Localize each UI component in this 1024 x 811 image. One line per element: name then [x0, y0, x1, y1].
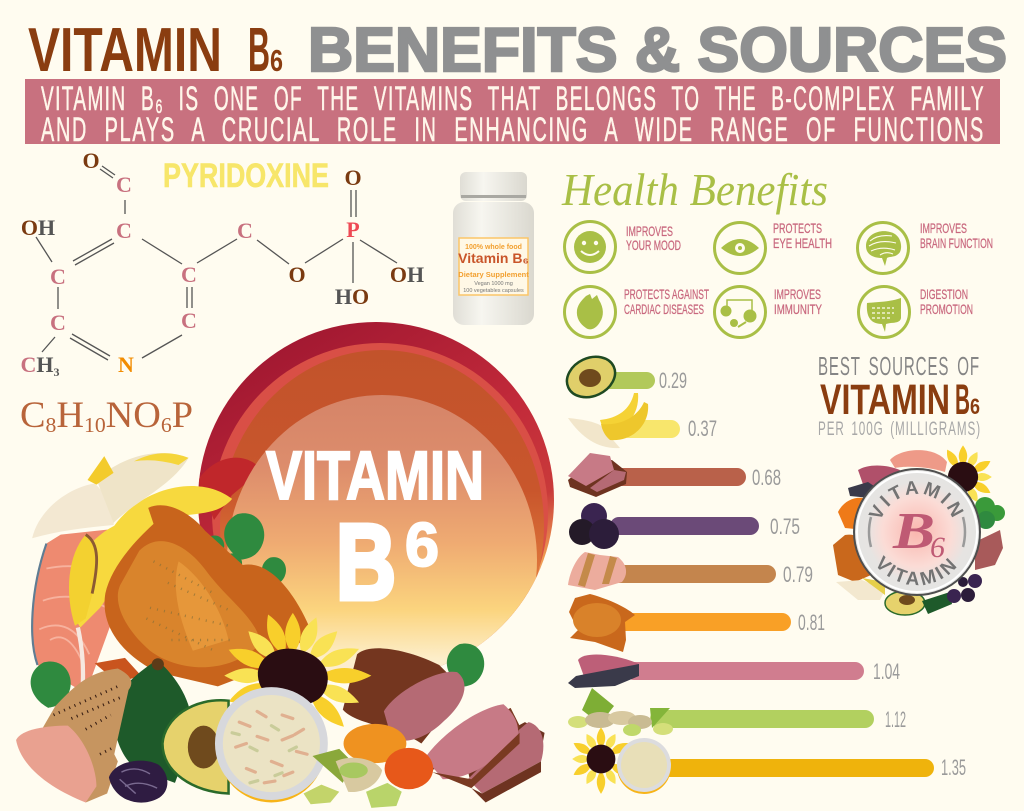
salmon [32, 529, 123, 694]
icon: supplement bottle: Vegan 1000 mg [474, 281, 513, 287]
bar: ham 0.79: 0.79 [783, 562, 813, 587]
text: digestion promotion [920, 286, 973, 317]
bar: chicken 0.81: 0.81 [798, 610, 825, 635]
bar: chicken 0.81 [569, 594, 825, 652]
badge: vitamin B6 with foods: VITAMIN [868, 481, 964, 518]
badge: vitamin B6 with foods [833, 446, 1005, 616]
chemical formula: P [172, 395, 193, 436]
text: improves your mood: IMPROVES [626, 223, 673, 239]
icon: heart [564, 286, 616, 338]
title: Vitamin B6: VITAMIN [28, 16, 222, 85]
chemical structure diagram: P [346, 217, 360, 242]
label: B6: 6 [405, 511, 439, 580]
bar: sunflower seeds 1.35: 1.35 [941, 755, 966, 780]
prune [109, 761, 167, 803]
chemical structure diagram: C [116, 172, 132, 197]
banner: intro text [25, 79, 1000, 149]
icon: supplement bottle [453, 172, 534, 325]
chemical structure diagram: C [237, 218, 253, 243]
text: improves brain function [920, 220, 993, 251]
bar: ham 0.79 [568, 552, 813, 590]
bar: pistachio 1.12 [568, 688, 906, 736]
icon: immunity [714, 286, 766, 338]
icon: mood [564, 222, 616, 272]
icon: brain [858, 222, 908, 274]
chemical structure diagram: C [181, 308, 197, 333]
label: B6: B [336, 501, 396, 622]
text: improves brain function: IMPROVES [920, 220, 967, 236]
heading: Pyridoxine: PYRIDOXINE [163, 157, 329, 195]
chemical structure diagram: C [50, 310, 66, 335]
title: Vitamin B6: 6 [270, 43, 283, 78]
text: improves immunity: IMPROVES [774, 286, 821, 302]
chemical formula: 6 [161, 413, 172, 437]
chemical formula: H [56, 395, 84, 436]
text: digestion promotion: DIGESTION [920, 286, 968, 302]
turkey ham [16, 669, 131, 802]
icon: supplement bottle: 100 vegetables capsules [463, 288, 524, 294]
badge: vitamin B6 with foods: B [892, 503, 935, 560]
label: Vitamin: VITAMIN [266, 437, 484, 514]
roast chicken [95, 505, 309, 686]
text: protects against cardiac diseases: CARDIAC DISEASES [624, 301, 704, 317]
text: protects against cardiac diseases [624, 286, 709, 317]
bar: avocado 0.29: 0.29 [659, 368, 687, 393]
text: protects eye health [773, 220, 832, 251]
spinach leaves [31, 513, 484, 708]
bar: sunflower seeds 1.35 [571, 727, 966, 794]
chemical formula: 10 [84, 413, 106, 437]
icon: supplement bottle: Vitamin B₆ [458, 250, 529, 266]
text: protects against cardiac diseases: PROTECTS AGAINST [624, 286, 709, 302]
food group illustration [16, 453, 545, 808]
chemical structure diagram: C [181, 262, 197, 287]
bar: beef 0.68 [568, 453, 781, 497]
badge: vitamin B6 with foods: VITAMIN [878, 555, 956, 586]
chemical structure diagram: CH [20, 352, 54, 377]
text: improves your mood: YOUR MOOD [626, 237, 681, 253]
bar: banana 0.37 [568, 393, 717, 448]
text: improves your mood [626, 223, 681, 253]
chemical structure diagram: O [344, 165, 362, 190]
bar: beef 0.68: 0.68 [752, 465, 781, 490]
heading: best sources of vitamin B6 [818, 351, 981, 440]
banana [32, 453, 232, 683]
sunflower [224, 612, 371, 732]
bar: prunes 0.75: 0.75 [770, 514, 800, 539]
chemical structure diagram: OH [390, 262, 424, 287]
chemical structure diagram: 3 [54, 365, 60, 379]
bar: prunes 0.75 [569, 503, 800, 549]
sliced beef pieces [425, 704, 545, 802]
icon: eye [714, 222, 766, 274]
title: Vitamin B6: B [248, 16, 270, 85]
text: digestion promotion: PROMOTION [920, 301, 973, 317]
badge: vitamin B6 with foods: 6 [930, 531, 945, 564]
heading: best sources of vitamin B6: 6 [970, 394, 980, 419]
bar: tuna 1.04: 1.04 [873, 659, 900, 684]
heading: best sources of vitamin B6: VITAMIN [820, 376, 950, 424]
dried apricots [344, 724, 433, 789]
chemical structure diagram: C [116, 218, 132, 243]
icon: digestion [858, 286, 910, 338]
bar: banana 0.37: 0.37 [688, 416, 717, 441]
text: improves immunity [774, 286, 822, 317]
vitamin capsule circle [198, 322, 554, 672]
chemical formula: C [20, 395, 45, 436]
bar: avocado 0.29 [560, 349, 687, 405]
chemical structure diagram: N [118, 352, 134, 377]
chemical structure diagram: OH [21, 215, 55, 240]
chemical formula: NO [106, 395, 161, 436]
text: protects eye health: PROTECTS [773, 220, 822, 236]
chemical structure diagram: O [288, 262, 306, 287]
chemical structure diagram: C [50, 264, 66, 289]
chemical structure diagram: HO [335, 284, 369, 309]
heading: best sources of vitamin B6: B [955, 376, 970, 424]
bar chart: best sources [560, 349, 966, 794]
icon: supplement bottle: Dietary Supplement [458, 270, 529, 279]
icon: supplement bottle: 100% whole food [465, 244, 522, 251]
pistachios [304, 749, 402, 808]
text: protects eye health: EYE HEALTH [773, 235, 832, 251]
whole avocado [114, 658, 192, 783]
text: improves immunity: IMMUNITY [774, 301, 822, 317]
chemical formula: 8 [46, 413, 56, 437]
heading: Health Benefits: Health Benefits [561, 164, 828, 215]
chemical structure diagram: O [82, 148, 100, 173]
title: Benefits and Sources: BENEFITS & SOURCES [308, 16, 1007, 85]
avocado half [162, 700, 229, 794]
sunflower seed bowl [215, 687, 328, 802]
sliced beef [343, 648, 465, 744]
chemical structure diagram [20, 148, 424, 379]
bar: tuna 1.04 [568, 654, 900, 688]
bar chart: best sources: 1.12 [885, 707, 906, 732]
